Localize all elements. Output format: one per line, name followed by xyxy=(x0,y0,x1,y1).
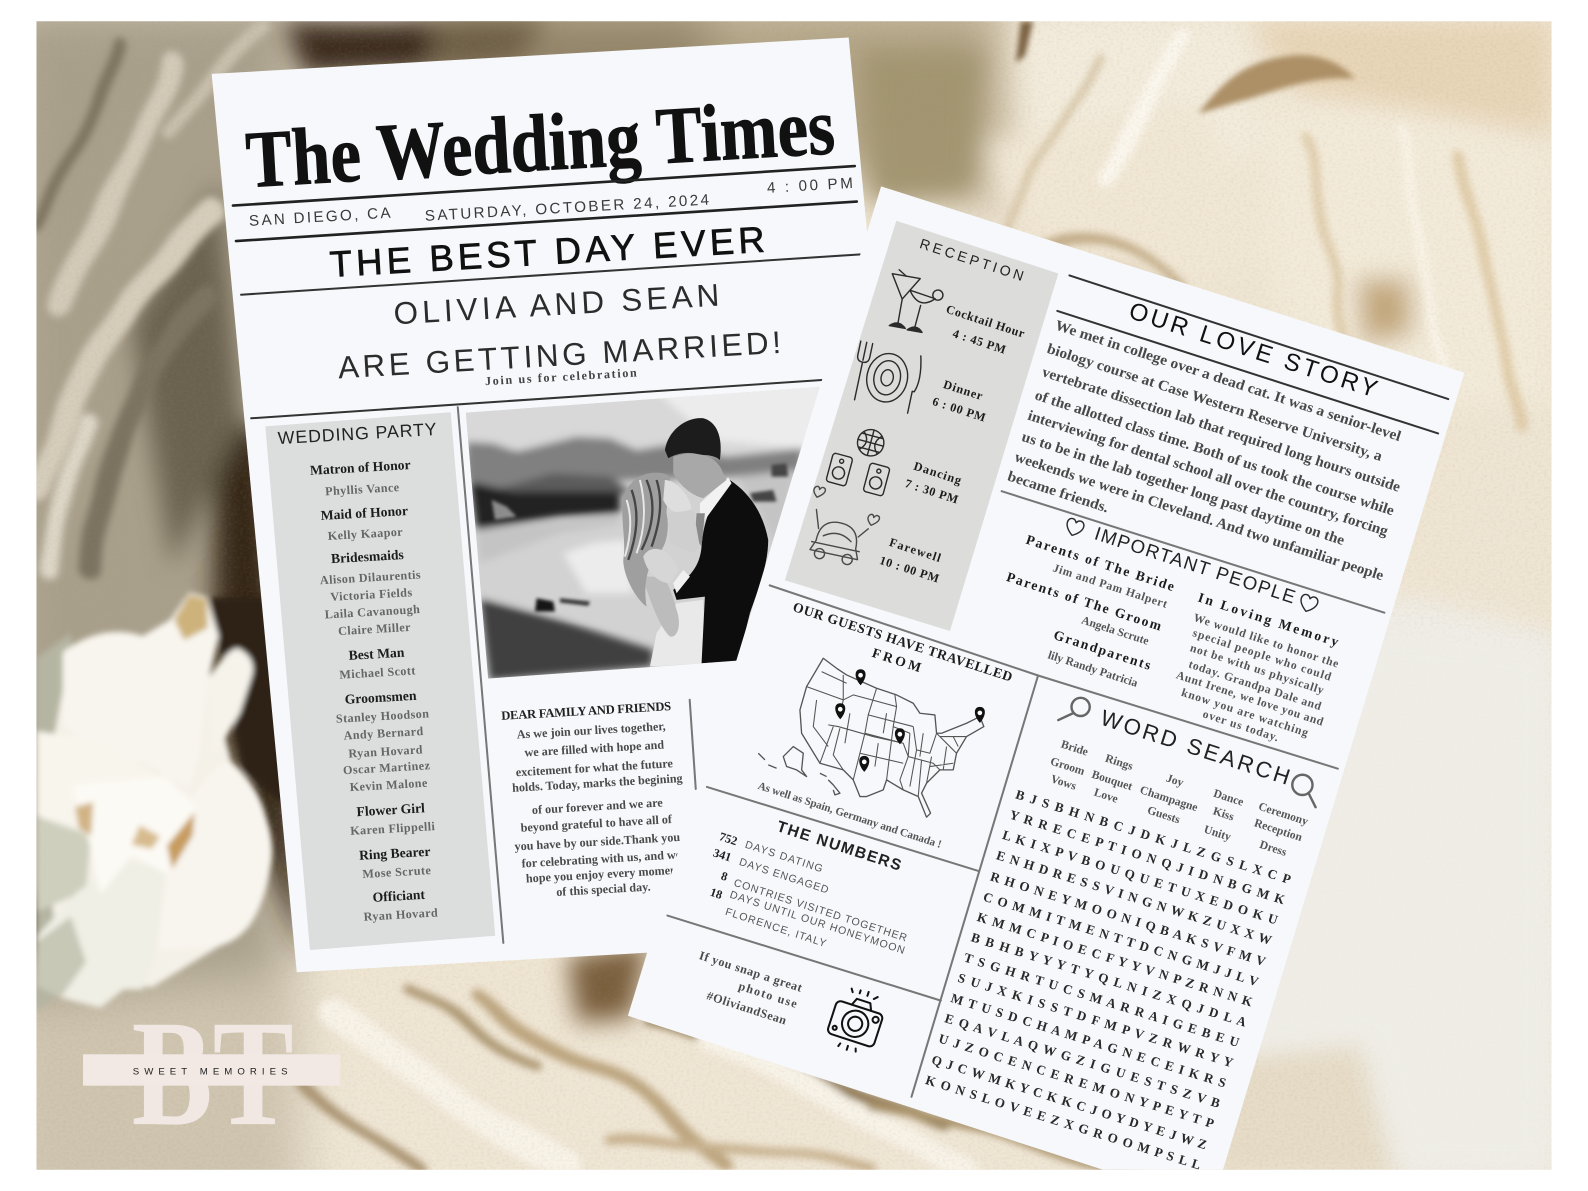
panel: important people: In Loving Memory xyxy=(1196,590,1341,649)
letter: dear family and friends: beyond grateful to have all of xyxy=(520,812,673,835)
crescent crease in cloth xyxy=(1198,55,1355,113)
panel: wedding party: Maid of Honor xyxy=(320,503,408,523)
icon: heart right xyxy=(1298,593,1319,614)
panel: the numbers: 8 xyxy=(719,869,729,884)
letter: dear family and friends: hope you enjoy every moment xyxy=(526,863,681,886)
dateline: SATURDAY, OCTOBER 24, 2024 xyxy=(424,192,709,225)
left card: front of newspaper xyxy=(212,37,934,972)
panel: the numbers: THE NUMBERS xyxy=(775,818,903,875)
panel: important people: Grandparents xyxy=(1052,627,1153,673)
our love story text: biology course at Case Western Reserve University, a xyxy=(1045,341,1385,465)
man's head xyxy=(673,454,727,498)
letter grid: U J Z O C E N C E R E M O N Y P E Y T P xyxy=(937,1031,1216,1131)
photo hashtag callout: photo use xyxy=(737,979,800,1011)
panel: important people: Aunt Irene, we love you and xyxy=(1175,669,1326,729)
our love story text: interviewing for dental school all over the country, forcing xyxy=(1026,408,1391,540)
our love story text: became friends. xyxy=(1005,469,1111,517)
icon: getaway car with hearts xyxy=(800,486,883,569)
panel: reception timeline xyxy=(785,221,1058,631)
couple photo xyxy=(466,387,820,678)
panel: important people: special people who could xyxy=(1191,626,1333,684)
couple names xyxy=(338,284,779,378)
panel: wedding party: Officiant xyxy=(372,887,426,905)
logo: Sweet Memories: SWEET MEMORIES xyxy=(133,1067,293,1078)
letter grid: Y R R E C E P T I O N Q J I D N B G M K xyxy=(1008,807,1287,907)
letter grid: B B H B Y Y Y T Y Q L N I Z X Q J D L A xyxy=(969,929,1249,1030)
panel: the numbers: DAYS UNTIL OUR HONEYMOON xyxy=(728,889,906,957)
reception: dancing: Dancing xyxy=(912,459,964,488)
word list xyxy=(1049,738,1310,859)
panel: wedding party: Karen Flippelli xyxy=(350,819,436,838)
panel: wedding party: Kevin Malone xyxy=(349,776,428,794)
map caption: As well as Spain, Germany and Canada ! xyxy=(756,780,943,851)
word list: Guests xyxy=(1146,804,1182,826)
headline: THE BEST DAY EVER xyxy=(329,219,766,285)
couple names: ARE GETTING MARRIED! xyxy=(337,325,782,385)
icon: cocktails xyxy=(888,269,944,334)
word list: Bride xyxy=(1059,738,1090,759)
word list: Groom xyxy=(1049,755,1087,778)
wedding party heading: WEDDING PARTY xyxy=(277,419,437,448)
icon: magnifier left xyxy=(1058,698,1090,720)
panel: wedding party: Bridesmaids xyxy=(331,547,404,566)
letter: dear family and friends: As we join our lives together, xyxy=(516,719,666,742)
icon: magnifier right xyxy=(1292,775,1316,807)
letter grid: Q J C W M K Y C K K C J O Y D Y E J W Z xyxy=(930,1052,1209,1152)
letter: dear family and friends: of this special day. xyxy=(556,880,651,899)
word list: Bouquet xyxy=(1090,768,1134,793)
letter grid: C O M M I T M E N T T D C N G M J J L V xyxy=(981,889,1261,989)
word list: Rings xyxy=(1104,752,1135,773)
letter grid xyxy=(924,787,1293,1173)
panel: reception timeline: 6 : 00 PM xyxy=(931,394,988,425)
word list: Unity xyxy=(1202,823,1233,844)
word search heading: WORD SEARCH xyxy=(1098,705,1293,790)
panel: wedding party: Matron of Honor xyxy=(310,457,411,478)
word list: Dress xyxy=(1258,838,1289,859)
panel: important people: Parents of The Bride xyxy=(1024,532,1176,594)
off-white table surface xyxy=(1205,598,1560,1180)
panel: the numbers: DAYS DATING xyxy=(743,839,824,875)
letter: dear family and friends: of our forever and we are xyxy=(532,795,664,817)
masthead title: The Wedding Times xyxy=(243,81,837,205)
letter grid: B J S B H N B C J D K J L Z G S L X C P xyxy=(1014,787,1293,887)
letter: dear family and friends: for celebrating with us, and we xyxy=(521,847,682,870)
panel: wedding party: Michael Scott xyxy=(339,663,416,682)
letter grid: E Q A V L A Q W G Z I G U E S T S Z V B xyxy=(943,1010,1222,1111)
icon: heart left xyxy=(1064,517,1085,538)
our love story text: weekends we were in Cleveland. And two unfamiliar people xyxy=(1013,449,1386,584)
letter grid: S U J X K I S S T D F M P V Z R W R Y Y xyxy=(956,970,1236,1070)
letter: dear family and friends: we are filled with hope and xyxy=(524,737,665,759)
reception heading: RECEPTION xyxy=(917,236,1025,285)
couple names: OLIVIA AND SEAN xyxy=(393,278,720,331)
reception: farewell: Farewell xyxy=(888,535,944,565)
letter grid: T S G H R T U C S M A R R A I G E B E U xyxy=(962,950,1242,1050)
logo: Sweet Memories: BT xyxy=(132,989,294,1157)
our love story text: us to be in the lab together long past daytime on the xyxy=(1020,429,1347,549)
panel: guests map: FROM xyxy=(870,645,923,675)
right card: back of newspaper xyxy=(628,186,1464,1191)
panel: important people xyxy=(1005,517,1341,744)
word list: Kiss xyxy=(1211,804,1236,824)
man's suit xyxy=(673,480,768,663)
word list: Joy xyxy=(1165,772,1185,789)
photo hashtag callout: #OliviandSean xyxy=(705,988,789,1027)
panel: wedding party: Claire Miller xyxy=(338,620,411,638)
panel: wedding party xyxy=(265,412,495,950)
letter: dear family and friends: holds. Today, marks the begining xyxy=(512,771,683,795)
word list: Champagne xyxy=(1138,783,1199,814)
panel: guests map xyxy=(756,599,1015,851)
panel: the numbers: FLORENCE, ITALY xyxy=(724,906,828,950)
woman's dress and arm xyxy=(650,600,705,667)
word list: Ceremony xyxy=(1257,800,1310,828)
our love story text xyxy=(1005,318,1403,584)
photo hashtag callout xyxy=(697,948,889,1057)
panel: the numbers: 341 xyxy=(711,846,733,864)
reception: dinner: Dinner xyxy=(942,377,985,403)
letter grid: E N H D R E S S V I N G N W K Z U X X W xyxy=(995,847,1274,948)
panel: the numbers: DAYS ENGAGED xyxy=(738,856,830,896)
word list: Vows xyxy=(1049,772,1078,793)
panel: wedding party: Andy Bernard xyxy=(343,724,424,743)
panel: important people: today. Grandpa Dale and xyxy=(1187,658,1323,713)
letter grid: M T U S D C H A M P A G N E C E I K R S xyxy=(949,990,1228,1090)
white flower xyxy=(36,592,289,1013)
panel: wedding party: Ryan Hovard xyxy=(348,742,423,761)
panel: the numbers: 18 xyxy=(708,885,724,902)
panel: reception timeline: 4 : 45 PM xyxy=(951,326,1008,357)
letter grid: L K I X P V B O U Q U E T U X E D O K U xyxy=(1001,827,1280,928)
map heading: OUR GUESTS HAVE TRAVELLED xyxy=(791,599,1015,685)
woman's hair and face xyxy=(622,473,670,607)
panel: important people: Parents of The Groom xyxy=(1005,569,1164,634)
word list: Reception xyxy=(1253,816,1304,844)
panel: reception timeline: 10 : 00 PM xyxy=(878,553,942,586)
panel: wedding party: Kelly Kaapor xyxy=(327,525,404,543)
our love story text: of the allotted class time. Both of us took the course while xyxy=(1033,388,1397,519)
panel: important people: We would like to honor the xyxy=(1192,611,1340,670)
panel: important people: over us today. xyxy=(1201,707,1280,744)
USA map with pins xyxy=(758,658,985,817)
panel: important people: not be with us physically xyxy=(1188,641,1326,697)
letter grid: K M M C P I O E C F Y Y V N P Z R N N K xyxy=(975,909,1255,1010)
dateline: 4 : 00 PM xyxy=(766,175,853,197)
panel: wedding party: Ryan Hovard xyxy=(363,905,438,924)
letter: dear family and friends: you have by our side.Thank you xyxy=(514,830,681,853)
panel: wedding party: Groomsmen xyxy=(344,688,417,707)
photo hashtag callout: If you snap a great xyxy=(697,948,804,995)
panel: wedding party: Flower Girl xyxy=(356,800,425,819)
letter: dear family and friends xyxy=(501,699,696,899)
panel: the numbers: 752 xyxy=(718,829,739,848)
dateline xyxy=(250,178,852,226)
reception: cocktail hour: Cocktail Hour xyxy=(944,302,1027,341)
panel: wedding party: Mose Scrute xyxy=(362,863,432,881)
letter grid: R H O N E Y M O O N I Q B A K S V F M V xyxy=(989,869,1268,969)
panel: wedding party: Stanley Hoodson xyxy=(336,706,430,726)
letter: dear family and friends: DEAR FAMILY AND FRIENDS xyxy=(501,699,671,723)
our love story heading: OUR LOVE STORY xyxy=(1126,297,1381,403)
panel: wedding party: Alison Dilaurentis xyxy=(320,567,421,587)
panel: wedding party: Victoria Fields xyxy=(330,585,413,604)
panel: important people: Jim and Pam Halpert xyxy=(1051,561,1169,611)
logo: Sweet Memories xyxy=(83,1024,340,1125)
word list: Dance xyxy=(1212,787,1245,809)
dateline: SAN DIEGO, CA xyxy=(249,205,392,230)
panel: important people: know you are watching xyxy=(1180,686,1310,739)
panel: important people: Angela Scrute xyxy=(1080,614,1150,648)
panel: word search xyxy=(924,698,1316,1173)
panel: the numbers: CONTRIES VISITED TOGETHER xyxy=(732,877,909,944)
letter: dear family and friends: excitement for what the future xyxy=(515,756,674,779)
letter grid: K O N S L O V E E Z X G R O O M P S L L xyxy=(924,1072,1203,1173)
invitation line: Join us for celebration xyxy=(485,365,637,388)
icon: dinner plate xyxy=(848,341,924,414)
panel: wedding party: Oscar Martinez xyxy=(343,758,431,777)
panel: the numbers xyxy=(708,818,909,957)
icon: camera xyxy=(824,984,889,1057)
our love story text: We met in college over a dead cat. It was a senior-level xyxy=(1053,318,1403,445)
panel: wedding party: Laila Cavanough xyxy=(324,602,421,621)
our love story text: vertebrate dissection lab that required long hours outside xyxy=(1040,364,1403,496)
word list: Love xyxy=(1092,786,1120,806)
important people heading: IMPORTANT PEOPLE xyxy=(1092,523,1298,607)
panel: wedding party: Phyllis Vance xyxy=(325,480,400,498)
panel: wedding party: Ring Bearer xyxy=(359,844,431,863)
panel: wedding party: Best Man xyxy=(348,645,405,663)
panel: important people: lily Randy Patricia xyxy=(1046,648,1140,690)
icon: disco ball and speakers xyxy=(826,421,899,496)
panel: reception timeline: 7 : 30 PM xyxy=(903,476,961,507)
